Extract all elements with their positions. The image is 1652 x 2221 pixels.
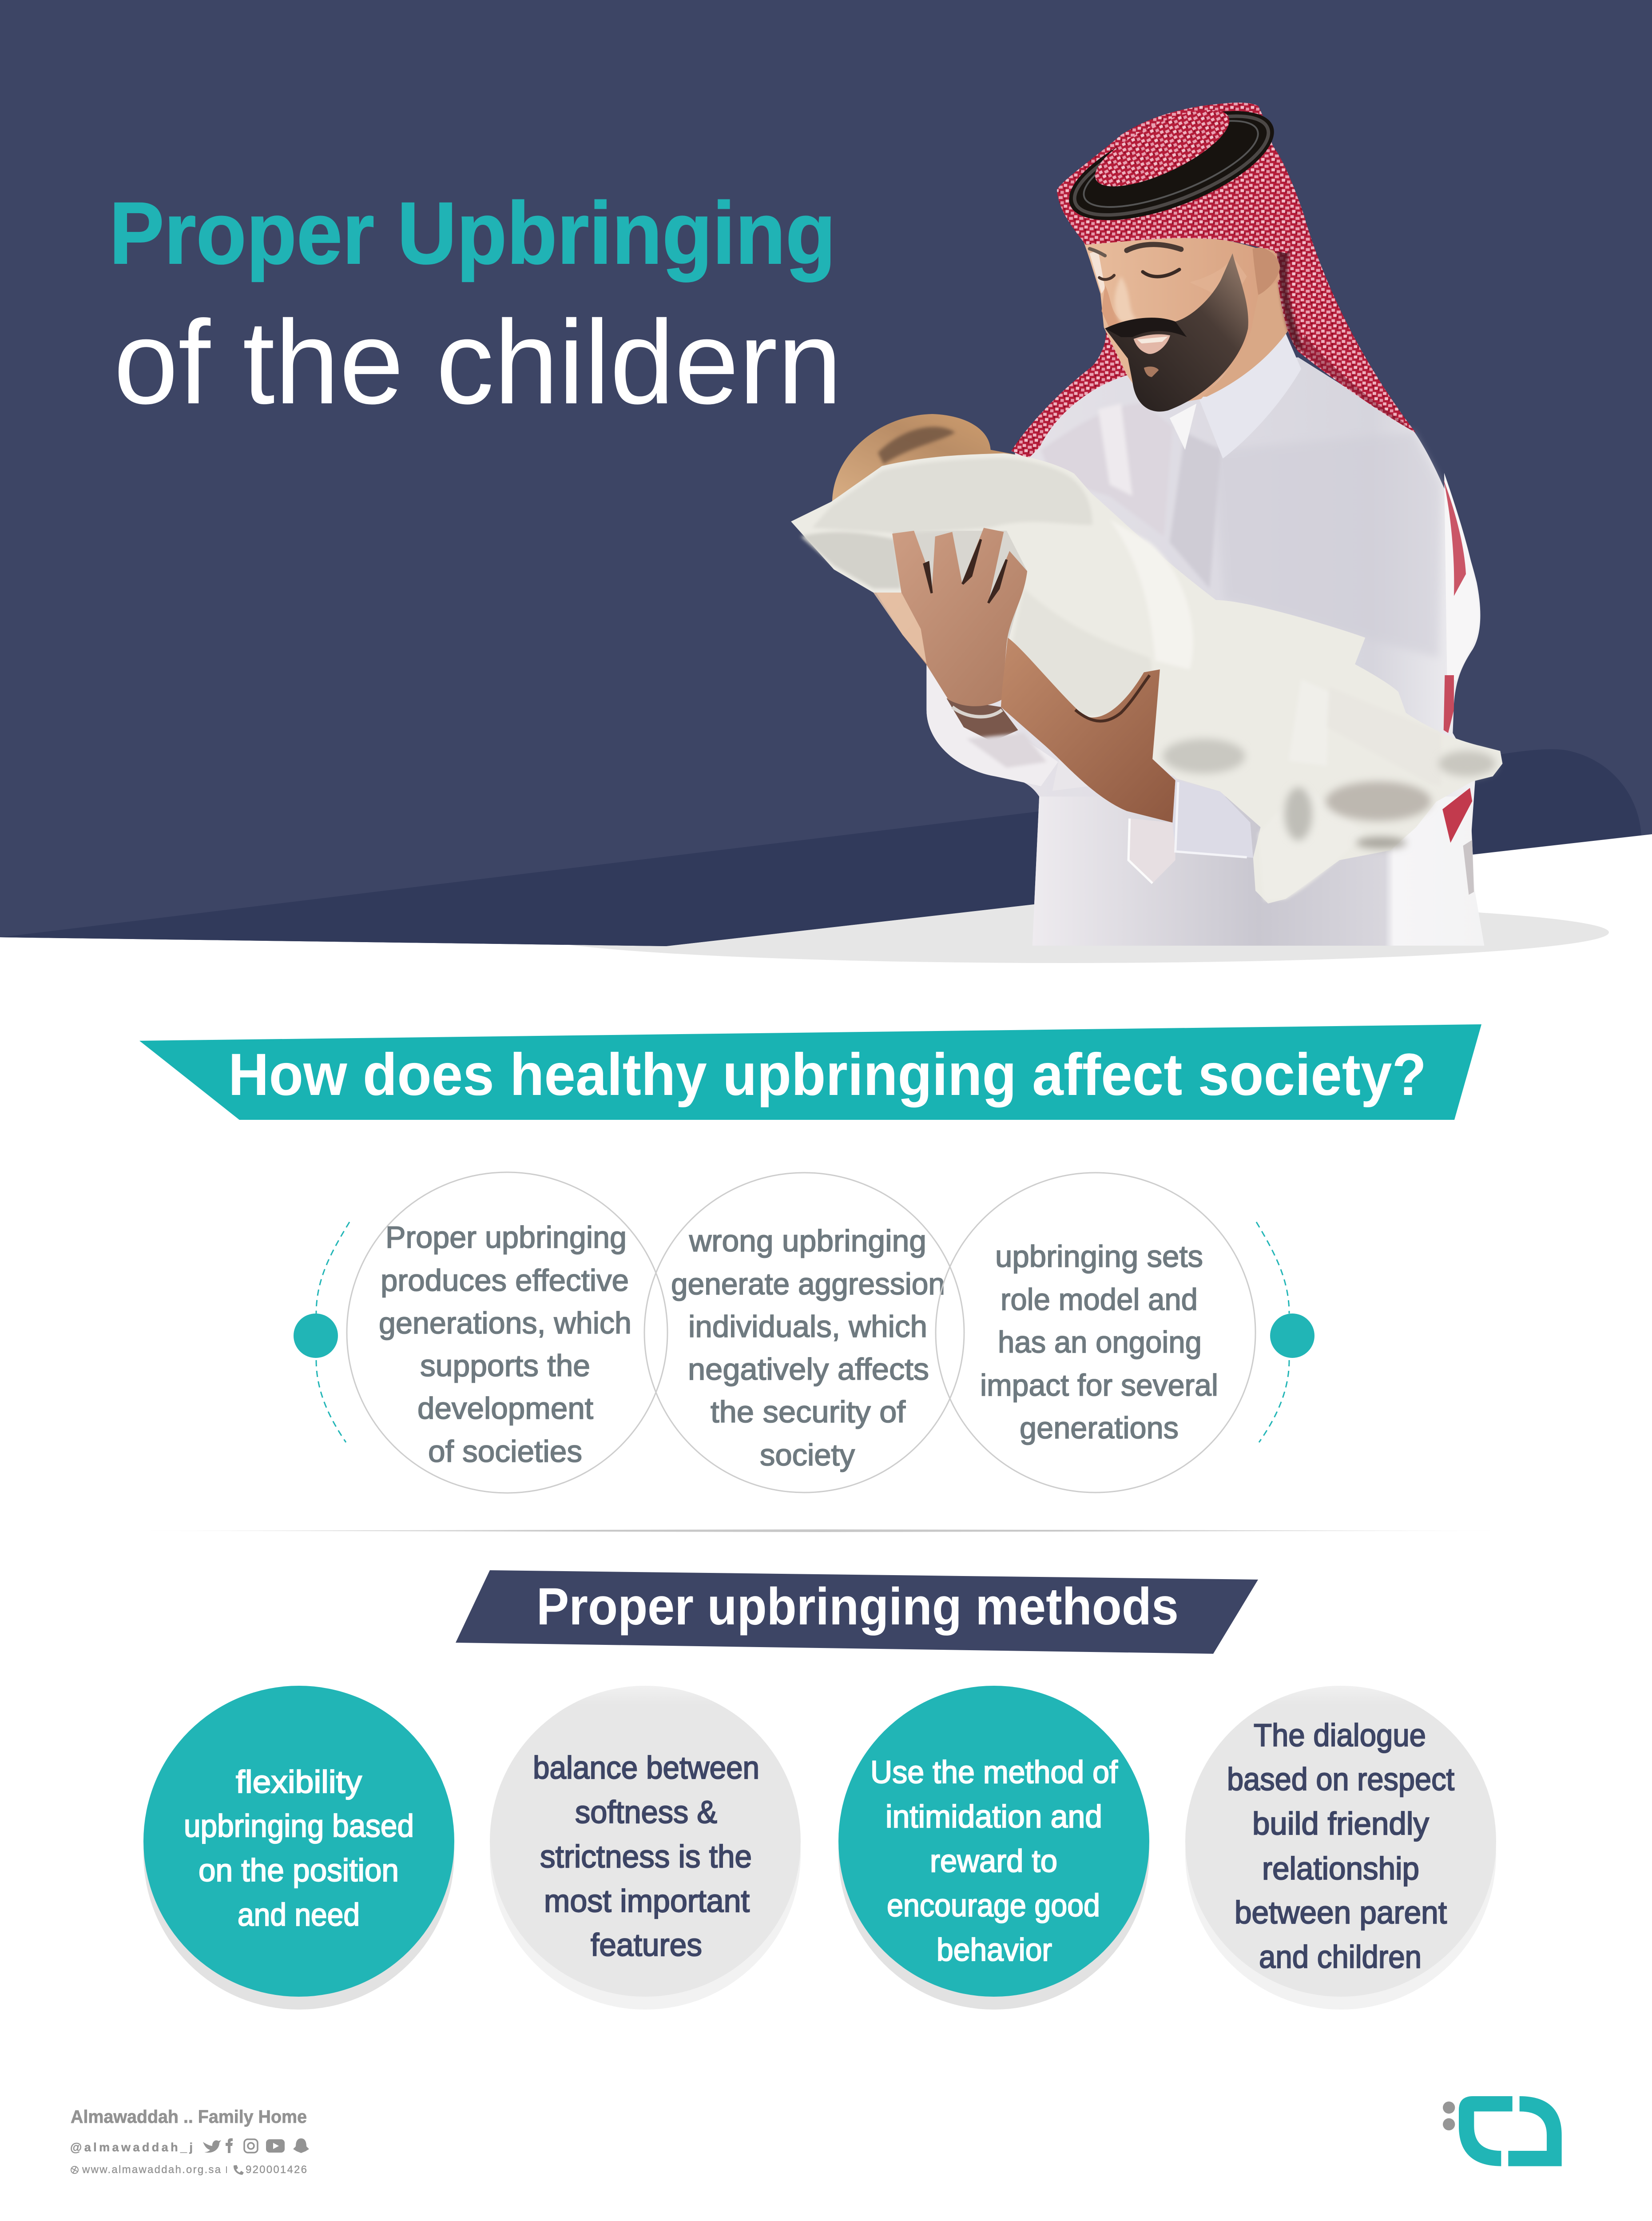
headdress drape left [1011, 326, 1134, 458]
logo [1443, 2096, 1562, 2166]
left timeline marker [294, 1222, 349, 1442]
lower hand [1001, 637, 1175, 823]
headdress wrap [1057, 103, 1305, 253]
title: Proper Upbringing [109, 184, 836, 282]
method 1: on the position [199, 1853, 399, 1888]
headdress drape right [1273, 216, 1416, 433]
header background [0, 0, 1652, 946]
circle 2: generate aggression [671, 1267, 945, 1301]
circle 3: generations [1020, 1411, 1179, 1445]
circle 1: produces effective [381, 1263, 629, 1298]
footer contact block: @almawaddah_j [70, 2141, 193, 2154]
title [109, 184, 842, 429]
method 2: most important [544, 1884, 750, 1919]
method 4: build friendly [1252, 1807, 1429, 1842]
method 4: relationship [1262, 1851, 1419, 1887]
beard and moustache [1105, 253, 1248, 412]
mouth [1134, 334, 1170, 377]
circle 3: has an ongoing [998, 1325, 1202, 1359]
panel: overlapping society circles [294, 1172, 1314, 1493]
method 4 [1185, 1686, 1496, 2010]
method 3: intimidation and [886, 1799, 1102, 1835]
face [1082, 233, 1280, 408]
circle 2 [644, 1173, 964, 1493]
headdress crown [1086, 95, 1239, 201]
neck [1201, 247, 1290, 397]
circle 2: wrong upbringing [689, 1224, 926, 1258]
method 1: upbringing based [184, 1809, 414, 1844]
icon: twitter [203, 2140, 221, 2153]
method 2: softness & [575, 1795, 717, 1830]
method 1: flexibility [236, 1765, 362, 1800]
method 3: Use the method of [870, 1755, 1118, 1790]
icon: phone [234, 2165, 244, 2175]
circle 2: the security of [711, 1395, 906, 1429]
method 4: and children [1259, 1940, 1422, 1975]
circle 1 [347, 1172, 667, 1493]
heading text: How does healthy upbringing affect society? [228, 1042, 1426, 1108]
chest placket and collar [1041, 326, 1301, 589]
circle 2: negatively affects [688, 1352, 929, 1386]
icon: facebook [226, 2138, 233, 2153]
method 4: The dialogue [1254, 1718, 1426, 1753]
illustration: father holding baby [791, 88, 1502, 946]
agal black ring [1056, 88, 1287, 243]
circle 3 [936, 1173, 1255, 1493]
left sleeve cuff [926, 664, 1058, 786]
circle 2: individuals, which [688, 1310, 927, 1344]
thobe upper body [926, 357, 1484, 946]
icon: snapchat [293, 2138, 309, 2153]
method 1 [143, 1686, 454, 2010]
baby blanket [791, 453, 1502, 904]
red scarf edges [1442, 480, 1474, 895]
footer contact block: www.almawaddah.org.sa [82, 2164, 221, 2176]
eyes and brows [1089, 244, 1181, 279]
blanket folds [801, 458, 1442, 900]
circle 3: role model and [1001, 1282, 1198, 1317]
title: of the childern [114, 295, 842, 429]
method 2: balance between [533, 1751, 759, 1786]
right timeline marker [1256, 1222, 1314, 1442]
method 1: and need [238, 1898, 360, 1933]
circle 1: of societies [428, 1434, 582, 1469]
circle 3: impact for several [980, 1368, 1218, 1402]
circle 1: supports the [420, 1349, 590, 1383]
method 2: features [591, 1928, 702, 1963]
blanket soft shadows [1163, 739, 1496, 848]
header darker wave [0, 749, 1641, 946]
footer contact block: Almawaddah .. Family Home [71, 2106, 307, 2127]
methods heading text: Proper upbringing methods [536, 1577, 1179, 1636]
banner: society heading [139, 1024, 1481, 1120]
baby head [832, 414, 1015, 503]
method 2 [490, 1686, 801, 2010]
circle 2: society [760, 1438, 855, 1472]
icon: youtube [266, 2139, 285, 2153]
right shirt cuff [1128, 780, 1253, 883]
blanket backing behind fingers [892, 531, 1027, 646]
circle 1: Proper upbringing [385, 1220, 627, 1254]
icon: globe [71, 2166, 78, 2173]
upper hand [874, 528, 1027, 706]
method 2: strictness is the [540, 1839, 752, 1875]
icon: instagram [244, 2139, 258, 2153]
method 4: based on respect [1227, 1762, 1454, 1797]
circle 1: generations, which [379, 1306, 631, 1340]
banner: methods heading [456, 1570, 1258, 1654]
ground shadow ellipse [523, 902, 1609, 963]
panel: method circles [143, 1686, 1496, 2010]
circle 1: development [417, 1391, 593, 1425]
method 3: behavior [937, 1933, 1052, 1968]
method 3: encourage good [887, 1888, 1100, 1923]
method 3 [838, 1686, 1149, 2010]
footer contact block [70, 2106, 309, 2176]
method 3: reward to [930, 1844, 1057, 1879]
footer contact block: 920001426 [246, 2164, 307, 2176]
method 4: between parent [1235, 1895, 1447, 1930]
circle 3: upbringing sets [995, 1239, 1203, 1274]
